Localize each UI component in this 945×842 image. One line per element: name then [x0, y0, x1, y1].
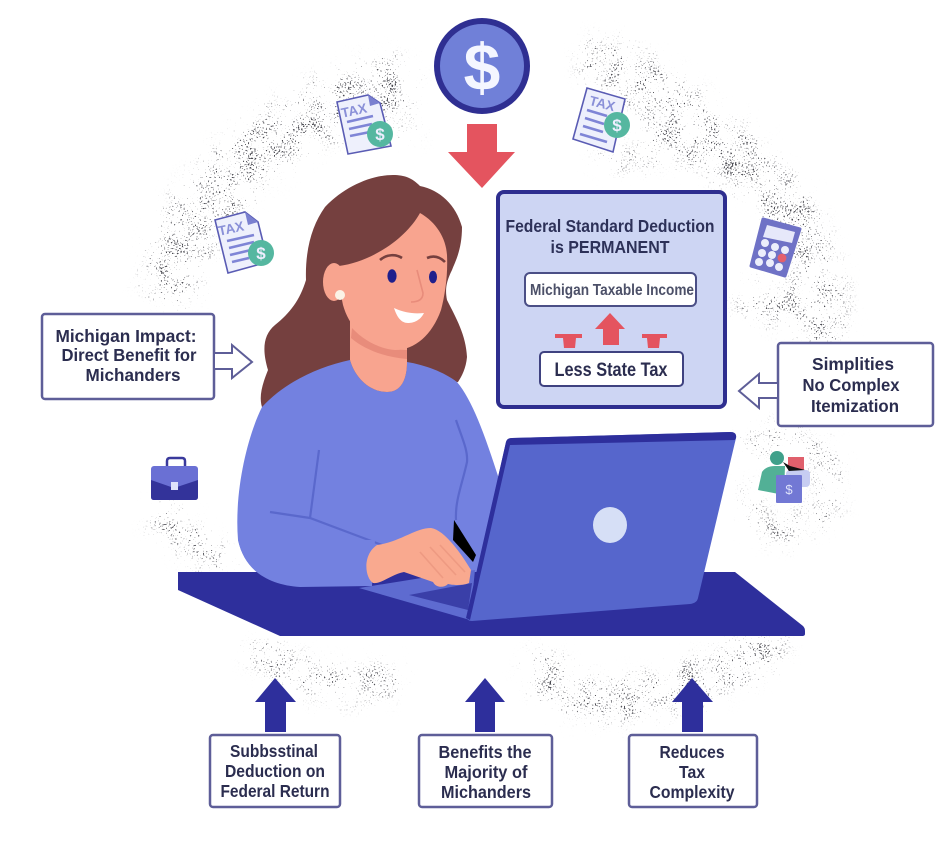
box: less state tax [540, 352, 683, 386]
keyboard base [359, 570, 475, 620]
callout: michigan impact: Direct Benefit for [62, 345, 197, 365]
callout: substantial deduction: Deduction on [225, 761, 325, 781]
callout: simplifies: No Complex [802, 375, 900, 395]
laptop logo [593, 507, 627, 543]
ear [323, 263, 345, 301]
panel heading: is PERMANENT [550, 237, 670, 257]
callout: reduces complexity: Reduces [660, 742, 725, 762]
arrow: outline right arrow [214, 345, 252, 378]
icon: dollar coin [437, 21, 527, 111]
icon: tax document left upper: TAX [340, 101, 368, 121]
panel: federal standard deduction [498, 192, 725, 407]
callout: benefits majority: Majority of [444, 762, 528, 782]
callout: benefits majority: Benefits the [438, 742, 532, 762]
box: michigan taxable income: Michigan Taxable Income [530, 282, 694, 299]
arrow: outline left arrow [739, 374, 778, 408]
hair [261, 175, 467, 410]
laptop edge [466, 432, 736, 620]
touchpad [409, 583, 472, 610]
callout: michigan impact [42, 314, 214, 399]
callout: simplifies: Itemization [811, 396, 899, 416]
speckle ring background [165, 62, 831, 700]
sweater fold lines [270, 420, 467, 545]
illustration: woman at laptop [178, 175, 805, 636]
arrow: bottom left up arrow [255, 678, 296, 732]
icon: red left marker [555, 334, 582, 348]
finger lines [420, 545, 465, 578]
eyebrows [380, 255, 445, 262]
icon: dollar coin: $ [464, 30, 500, 104]
panel heading: Federal Standard Deduction [506, 216, 714, 236]
earring [335, 290, 345, 300]
icon: people and documents cluster [758, 451, 810, 503]
face [339, 213, 447, 350]
neck [350, 320, 407, 392]
arrow: red down arrow from coin [448, 124, 515, 188]
arrow: red up arrow [595, 313, 625, 345]
sweater [237, 360, 505, 590]
callout: michigan impact: Michanders [86, 365, 181, 385]
right eye [429, 271, 437, 283]
left eye [387, 269, 397, 283]
icon: tax document left lower [215, 212, 274, 273]
callout: michigan impact: Michigan Impact: [56, 326, 196, 346]
callout: reduces complexity: Tax [679, 762, 705, 782]
icon: tax document right: $ [612, 116, 622, 135]
nose [411, 270, 423, 302]
arrow: bottom right up arrow [672, 678, 713, 732]
icon: people and documents cluster: $ [785, 482, 793, 497]
icon: tax document left lower: $ [256, 244, 266, 263]
panel heading [506, 216, 714, 257]
hand [366, 528, 471, 587]
callout: benefits majority: Michanders [441, 782, 531, 802]
icon: tax document left lower: TAX [217, 219, 245, 239]
laptop screen [467, 432, 736, 621]
icon: red right marker [642, 334, 667, 348]
callout: benefits majority [419, 735, 552, 807]
callout: reduces complexity: Complexity [650, 782, 735, 802]
icon: briefcase [151, 458, 198, 500]
arrow: bottom centre up arrow [465, 678, 505, 732]
desk [178, 572, 805, 636]
callout: substantial deduction: Subbsstinal [230, 741, 318, 761]
box: michigan taxable income [525, 273, 696, 306]
icon: tax document left upper: $ [375, 125, 385, 144]
callout: reduces complexity [629, 735, 757, 807]
callout: substantial deduction: Federal Return [220, 781, 330, 801]
icon: tax document left upper [337, 95, 393, 154]
black wedge [453, 520, 476, 562]
icon: tax document right: TAX [588, 93, 617, 114]
callout: simplifies: Simplities [812, 354, 894, 374]
icon: calculator [751, 219, 800, 276]
box: less state tax: Less State Tax [554, 360, 668, 381]
callout: substantial deduction [210, 735, 340, 807]
icon: tax document right [573, 88, 630, 152]
smile [394, 308, 424, 323]
neck shadow [351, 328, 407, 359]
callout: simplifies [778, 343, 933, 426]
torso over desk [238, 540, 375, 587]
